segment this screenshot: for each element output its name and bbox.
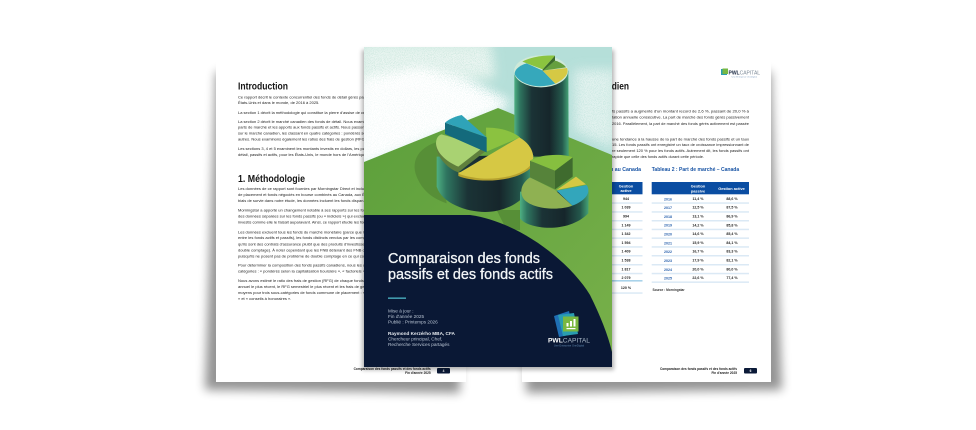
table 2: part de marché Canada: 2018 (664, 215, 672, 219)
text block: méthodologie: Les données excluent tous les fonds du marché monétaire (parce que la distinction (238, 229, 385, 234)
text block: introduction: Ce rapport décrit le contexte concurrentiel des fonds de détail gérés passivement et activement au Canada (238, 94, 428, 99)
table 1: actifs sous gestion au Canada (538, 167, 642, 294)
table 1: actifs sous gestion au Canada: 1 594 (622, 241, 630, 245)
panel: navy title block (364, 215, 612, 367)
table 1: actifs sous gestion au Canada: 1 149 (622, 223, 630, 227)
table 2: part de marché Canada: 15,9 % (692, 241, 704, 245)
logo: PWL Capital (548, 311, 590, 348)
table 2: part de marché Canada: 83,3 % (726, 250, 738, 254)
table 2: part de marché Canada: 14,6 % (692, 232, 704, 236)
logo: PWL Capital: Une Entreprise OneDigital (554, 344, 584, 348)
table 2: part de marché Canada: 84,1 % (726, 241, 738, 245)
table 2: part de marché Canada: 77,4 % (726, 276, 738, 280)
illustration: sky with clouds (364, 47, 612, 162)
footer: right page (660, 367, 757, 375)
table 2: part de marché Canada: Gestion (691, 184, 706, 188)
title: Comparaison des fonds (388, 251, 540, 267)
text block: méthodologie: « et « conseils à honoraires ». (238, 296, 291, 301)
table 2: part de marché Canada: 2022 (664, 250, 672, 254)
illustration: 3D pie charts (415, 55, 589, 230)
text block: publication dates (388, 308, 438, 324)
table 1: actifs sous gestion au Canada: 1 817 (622, 268, 630, 272)
table 2: part de marché Canada: 88,6 % (726, 197, 738, 201)
text block: author: Recherche Services partagés (388, 342, 450, 347)
text block: méthodologie: entre les fonds actifs et passifs), les fonds distincts vendus par les compagnies (238, 235, 378, 240)
table 2: part de marché Canada: 86,9 % (726, 215, 738, 219)
footer: left page (354, 367, 450, 375)
table 2: part de marché Canada: 2024 (664, 268, 672, 272)
chart: large pie (436, 115, 533, 212)
text block: méthodologie: Les données de ce rapport sont fournies par Morningstar Direct et incluent les fonds (238, 186, 387, 191)
logo: PWL Capital small (721, 68, 760, 78)
table 2: part de marché Canada: 2016 (664, 197, 672, 201)
heading: marché canadien: 2. Le marché canadien (539, 81, 629, 93)
table 2: part de marché Canada: 87,5 % (726, 206, 738, 210)
table 2: part de marché Canada: 85,4 % (726, 232, 738, 236)
panel: right report page (522, 58, 782, 393)
text block: publication dates: Fin d'année 2025 (388, 314, 424, 319)
illustration: green ground (364, 108, 612, 367)
text block: méthodologie: qu'ils sont des contrats d'assurance plutôt que des produits d'investissement (238, 241, 374, 246)
text block: introduction: détail, passifs et actifs, pour les États-Unis, le monde hors de l'Amérique du Nord (238, 152, 382, 157)
text block: analysis: rapide que celle des fonds actifs durant cette période. (612, 154, 704, 159)
table 2: part de marché Canada: 16,7 % (692, 250, 704, 254)
table 2: part de marché Canada: 2021 (664, 241, 672, 245)
footer: right page: Fin d'année 2025 (711, 371, 737, 375)
table 2: part de marché Canada: 2023 (664, 259, 672, 263)
footer: left page: 4 (443, 369, 445, 373)
title (388, 251, 553, 283)
text block: author: Raymond Kerzérho MBA, CFA (388, 331, 456, 336)
text block: méthodologie: investis comme elle le faisait auparavant. Ainsi, ce rapport étudie les fonds (238, 220, 370, 225)
table 1: actifs sous gestion au Canada: 994 (623, 215, 629, 219)
table 1: actifs sous gestion au Canada: 2 079 (622, 276, 630, 280)
text block: publication dates: Mise à jour : (388, 308, 414, 313)
table 1: actifs sous gestion au Canada: Tableau 1 : Actifs sous gestion au Canada (538, 167, 641, 173)
text block: analysis: fs passifs a augmenté d'un montant record de 2,6 %, passant de 20,0 % à (612, 109, 750, 114)
table 2: part de marché Canada: 2025 (664, 276, 672, 280)
title: passifs et des fonds actifs (388, 267, 553, 283)
text block: analysis: 15. Les fonds passifs ont enregistré un taux de croissance impressionnant de (612, 142, 750, 147)
table 1: actifs sous gestion au Canada: 120 % (621, 286, 632, 290)
table 2: part de marché Canada: 2017 (664, 206, 672, 210)
table 2: part de marché Canada: 12,5 % (692, 206, 704, 210)
text block: analysis: re seulement 120 % pour les fonds actifs. Autrement dit, les fonds passifs ont (612, 148, 750, 153)
text block: méthodologie: des données séparées sur les fonds passifs (ou « indiciels ») qui excluent (238, 214, 369, 218)
text block: author (388, 331, 456, 347)
table 2: part de marché Canada: 85,8 % (726, 223, 738, 227)
table 2: part de marché Canada: 13,1 % (692, 215, 704, 219)
table 1: actifs sous gestion au Canada: 944 (623, 197, 629, 201)
text block: introduction: autres. Nous examinons également les ratios des frais de gestion (RFG) des fonds (238, 137, 385, 142)
table 2: part de marché Canada: 80,0 % (726, 268, 738, 272)
text block: introduction: sur le marché canadien, les classant en quatre catégories : pondérés selon (238, 131, 371, 136)
text block: méthodologie: annuel le plus récent, le RFG semestriel le plus récent et les frais de gestion (238, 284, 373, 289)
logo: PWL Capital small: Une Entreprise OneDigital (732, 76, 758, 78)
table 2: part de marché Canada: 22,6 % (692, 276, 704, 280)
footer: right page: 6 (750, 369, 752, 373)
text block: publication dates: Publié : Printemps 2026 (388, 320, 438, 324)
table 1: actifs sous gestion au Canada: 1 342 (622, 232, 630, 236)
panel: report cover (354, 37, 625, 370)
footer: left page: Comparaison des fonds passifs et des fonds actifs (354, 367, 431, 371)
text block: analysis (612, 109, 750, 159)
text block: introduction: La section 1 décrit la méthodologie qui constitue la pierre d'assise de ce rapport. (238, 110, 380, 115)
cast shadows (415, 137, 569, 230)
table 2: part de marché Canada: 82,1 % (726, 259, 738, 263)
text block: méthodologie: double comptage). À noter cependant que les FNB détenant des FNB ont (238, 247, 369, 252)
text block: méthodologie: puisqu'ils ne posent pas de problème de double comptage en ce qui concerne (238, 253, 377, 258)
text block: méthodologie: moyens pour trois sous-catégories de fonds commune de placement : « » (238, 290, 369, 295)
text block: méthodologie: catégories : « pondérés selon la capitalisation boursière », « factoriels » (238, 268, 366, 274)
table 2: part de marché Canada: 14,2 % (692, 223, 704, 227)
panel: left report page (205, 58, 466, 393)
logo: PWL Capital small: PWLCAPITAL (728, 70, 760, 76)
table 2: part de marché Canada: 17,9 % (692, 259, 704, 263)
table 1: actifs sous gestion au Canada: 1 538 (622, 259, 630, 263)
table 2: part de marché Canada: 2020 (664, 232, 672, 236)
text block: introduction: Les sections 3, 4 et 5 examinent les montants investis en dollars, les parts de marché (238, 146, 390, 151)
text block: méthodologie: biais de survie dans notre étude, les données incluent les fonds disparus (238, 198, 367, 203)
text block: introduction: parts de marché et les apports aux fonds passifs et actifs. Nous passons en revue (238, 125, 384, 130)
table 1: actifs sous gestion au Canada: Gestion (619, 183, 634, 188)
table 2: part de marché Canada: passive (691, 188, 706, 193)
text block: analysis: une tendance à la hausse de la part de marché des fonds passifs et un taux (612, 136, 749, 141)
text block: méthodologie: Morningstar a apporté un changement notable à ses rapports sur les fonds (238, 208, 370, 212)
table 2: part de marché Canada: Source : Morningstar (652, 288, 685, 292)
table 2: part de marché Canada (652, 167, 749, 292)
table 2: part de marché Canada: 2019 (664, 224, 672, 228)
text block: méthodologie: de placement et fonds négociés en bourse combinés au Canada, aux États-Unis et (238, 192, 386, 197)
text block: author: Chercheur principal, Chef, (388, 336, 442, 341)
text block: méthodologie (238, 186, 387, 301)
heading: 1. Méthodologie: 1. Méthodologie (238, 173, 305, 185)
text block: introduction: La section 2 décrit le marché canadien des fonds de détail. Nous examinons les (238, 119, 379, 124)
text block: analysis: 2016. Parallèlement, la part de marché des fonds gérés activement est passée (612, 121, 750, 126)
text block: analysis: tation annuelle consécutive. La part de marché des fonds gérés passivement (612, 114, 750, 119)
text block: méthodologie: Nous avons estimé le ratio des frais de gestion (RFG) de chaque fonds à partir (238, 278, 378, 283)
text block: méthodologie: Pour déterminer la composition des fonds passifs canadiens, nous les classons (238, 262, 379, 268)
logo: PWL Capital: PWLCAPITAL (548, 338, 590, 344)
table 1: actifs sous gestion au Canada: 1 039 (622, 206, 630, 210)
footer: left page: Fin d'année 2025 (405, 371, 431, 375)
table 2: part de marché Canada: 20,0 % (692, 268, 704, 272)
footer: right page: Comparaison des fonds passifs et des fonds actifs (660, 367, 737, 371)
heading: Introduction: Introduction (238, 80, 288, 92)
table 2: part de marché Canada: 11,4 % (692, 197, 704, 201)
chart: small pie (520, 155, 589, 228)
text block: introduction (238, 94, 428, 157)
text block: introduction: États-Unis et dans le monde, de 2016 à 2025. (238, 100, 319, 105)
chart: tall cylinder pie (514, 55, 569, 157)
table 2: part de marché Canada: Gestion active (718, 186, 746, 191)
table 1: actifs sous gestion au Canada: 1 409 (622, 250, 630, 254)
table 2: part de marché Canada: Tableau 2 : Part de marché – Canada (652, 167, 739, 173)
table 1: actifs sous gestion au Canada: active (620, 188, 632, 193)
